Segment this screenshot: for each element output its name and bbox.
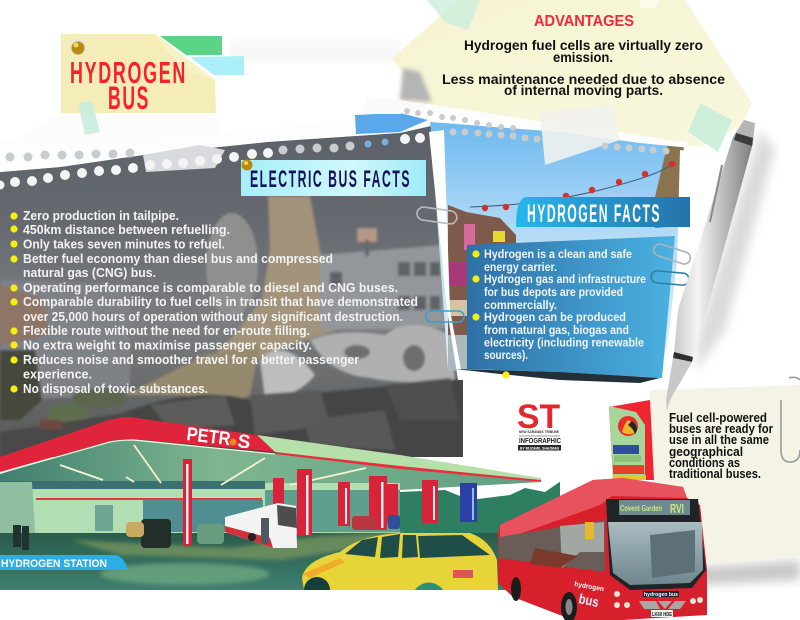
- electric bus facts list: Zero production in tailpipe.: [23, 209, 179, 223]
- ST infographic logo: BY MUZAMIL SHAZMAN: [520, 446, 559, 450]
- heading: electric bus facts: ELECTRIC BUS FACTS: [250, 166, 411, 193]
- bullets: [10, 212, 18, 393]
- electric bus facts list: over 25,000 hours of operation without any significant destruction.: [23, 310, 403, 324]
- canopy lights: [60, 445, 366, 485]
- upper torn paper: [0, 40, 440, 180]
- advantages note background: [392, 0, 752, 152]
- pillars: [183, 459, 477, 546]
- destination display: [619, 500, 690, 515]
- bus body: [498, 478, 707, 620]
- torn paper band across panels: [0, 97, 690, 190]
- building wall: [32, 483, 400, 533]
- electric bus facts list: [10, 209, 418, 396]
- heading: hydrogen facts: [516, 197, 690, 228]
- lantern string: [470, 161, 675, 211]
- hydrogen facts list: for bus depots are provided: [484, 287, 623, 299]
- photo: rubble: [125, 378, 470, 460]
- electric bus facts list: natural gas (CNG) bus.: [23, 266, 156, 280]
- red bus: hydrogen bus: [644, 592, 678, 598]
- icon: gold pin: [242, 160, 252, 170]
- hydrogen facts list: electricity (including renewable: [484, 338, 644, 350]
- tape: [78, 101, 100, 135]
- hydrogen facts list: commercially.: [484, 300, 557, 312]
- electric bus facts list: Only takes seven minutes to refuel.: [23, 238, 225, 252]
- hydrogen facts list: Hydrogen gas and infrastructure: [484, 274, 646, 286]
- photo: cat spots: [344, 345, 425, 371]
- grille: [639, 601, 686, 609]
- heading: hydrogen facts: HYDROGEN FACTS: [527, 200, 661, 228]
- note: fuel cell buses: use in all the same: [669, 433, 769, 447]
- small bus: [225, 503, 297, 548]
- dark strip under blue panel: [455, 369, 660, 383]
- photo: hedge: [47, 403, 89, 425]
- windscreen frame: [606, 499, 706, 590]
- hydrogen facts list: sources).: [484, 350, 528, 362]
- canopy logo: S: [236, 431, 252, 454]
- photo: fast food sign: [357, 228, 377, 256]
- title text: BUS: [108, 80, 150, 116]
- photo: trees: [72, 388, 128, 408]
- left tree: [0, 482, 35, 535]
- electric bus facts list: experience.: [23, 368, 92, 382]
- canopy logo: [187, 427, 250, 448]
- hydrogen facts list: from natural gas, biogas and: [484, 325, 629, 337]
- livery text: hydrogen: [574, 581, 604, 593]
- cars: [126, 515, 400, 548]
- ground highlights: [70, 532, 405, 585]
- red stripe: [36, 498, 262, 500]
- bullets: [472, 250, 510, 379]
- icon: paper clip: [781, 377, 800, 462]
- tab: light blue: [190, 56, 244, 75]
- bus roof: [500, 478, 687, 541]
- lights: [614, 591, 703, 608]
- advantages text: of internal moving parts.: [504, 82, 663, 98]
- windscreen: [608, 522, 703, 585]
- canopy white edge line: [0, 440, 275, 473]
- photo: building: [320, 245, 446, 330]
- photo: left tree: [0, 350, 42, 420]
- ground: [0, 533, 560, 590]
- number plate: [651, 610, 673, 617]
- note: fuel cell buses: traditional buses.: [669, 467, 761, 481]
- icon: gold pin: [70, 39, 86, 55]
- ST infographic logo: ST: [517, 398, 560, 436]
- heading: electric bus facts: [241, 160, 426, 196]
- hydrogen facts list: energy carrier.: [484, 262, 557, 274]
- hydrogen station scene: [0, 417, 600, 590]
- page fold: [155, 34, 215, 80]
- panel: electric bus facts background photo: [0, 124, 470, 460]
- canopy red: [0, 417, 275, 472]
- side windows: [498, 520, 605, 572]
- photo: parked car: [40, 420, 62, 429]
- hydrogen facts list: [472, 249, 646, 379]
- right shop building: [655, 142, 684, 228]
- red bus: Covent Garden: [620, 504, 662, 513]
- electric bus facts list: No disposal of toxic substances.: [23, 382, 208, 396]
- note: fuel cell buses: geographical: [669, 445, 743, 459]
- title text: [70, 55, 187, 116]
- red bus: LK60 HDE: [652, 612, 672, 618]
- photo: white cat statue: [206, 213, 258, 317]
- photo: white cat lying: [310, 325, 455, 382]
- ST infographic logo: NEW SARAWAK TRIBUNE: [519, 429, 559, 434]
- title card: [61, 34, 244, 135]
- photo: building windows: [330, 262, 440, 310]
- red bus: bus: [577, 590, 600, 610]
- window band: [0, 481, 265, 489]
- yellow sign: [585, 522, 594, 539]
- canopy logo: PETR: [185, 424, 232, 450]
- left shop buildings: [448, 205, 516, 370]
- electric bus facts list: Reduces noise and smoother travel for a better passenger: [23, 353, 359, 367]
- advantages text: ADVANTAGES: [534, 13, 634, 30]
- panel: hydrogen facts photo: [429, 120, 693, 385]
- note: fuel cell buses: [650, 377, 800, 585]
- holes row on white paper: [6, 108, 670, 162]
- icon: paper clips: [416, 206, 692, 322]
- wheels: [511, 577, 521, 601]
- canopy green top: [257, 435, 541, 482]
- ST infographic logo: INFOGRAPHIC: [519, 438, 561, 445]
- photo: sandy paw: [128, 346, 258, 400]
- hydrogen facts list: Hydrogen is a clean and safe: [484, 249, 632, 261]
- distant trees: [400, 482, 560, 533]
- white photo border: [429, 130, 463, 380]
- hydrogen facts list: Hydrogen can be produced: [484, 312, 626, 324]
- note: fuel cell buses: conditions as: [669, 456, 740, 470]
- ceiling: [0, 439, 541, 490]
- photo: orange awning: [0, 285, 48, 345]
- advantages text: [442, 13, 725, 98]
- electric bus facts list: Operating performance is comparable to diesel and CNG buses.: [23, 281, 398, 295]
- bus front sign: [643, 591, 679, 597]
- petrol sign: [609, 400, 654, 480]
- people: [13, 525, 29, 550]
- advantages text: Hydrogen fuel cells are virtually zero: [464, 37, 703, 53]
- tab: green: [160, 36, 222, 55]
- advantages text: Less maintenance needed due to absence: [442, 71, 725, 87]
- advantages text: emission.: [553, 49, 613, 65]
- electric bus facts list: No extra weight to maximise passenger capacity.: [23, 338, 312, 352]
- photo: road: [0, 412, 126, 457]
- electric bus facts list: Better fuel economy than diesel bus and compressed: [23, 252, 333, 266]
- holes row on grey panel: [0, 133, 425, 190]
- door: [95, 505, 113, 531]
- electric bus facts list: 450km distance between refuelling.: [23, 223, 230, 237]
- title text: HYDROGEN: [70, 55, 187, 90]
- electric bus facts list: Flexible route without the need for en-route filling.: [23, 324, 310, 338]
- blue text panel: [467, 236, 675, 378]
- electric bus facts list: Comparable durability to fuel cells in transit that have demonstrated: [23, 295, 418, 309]
- tag: hydrogen station: HYDROGEN STATION: [1, 558, 107, 570]
- note: fuel cell buses: Fuel cell-powered: [669, 411, 767, 425]
- note: fuel cell buses: buses are ready for: [669, 422, 773, 436]
- driver area: [650, 530, 695, 578]
- yellow car: [302, 533, 498, 590]
- red bus: RVI: [670, 501, 684, 516]
- pillar highlights: [186, 464, 474, 544]
- red bus: [498, 478, 707, 620]
- photo: white kitten: [260, 350, 315, 400]
- photo: orange cat statue: [218, 196, 336, 360]
- back glass: [143, 500, 263, 532]
- icon: pen: [666, 120, 775, 411]
- photo: left building: [0, 280, 130, 400]
